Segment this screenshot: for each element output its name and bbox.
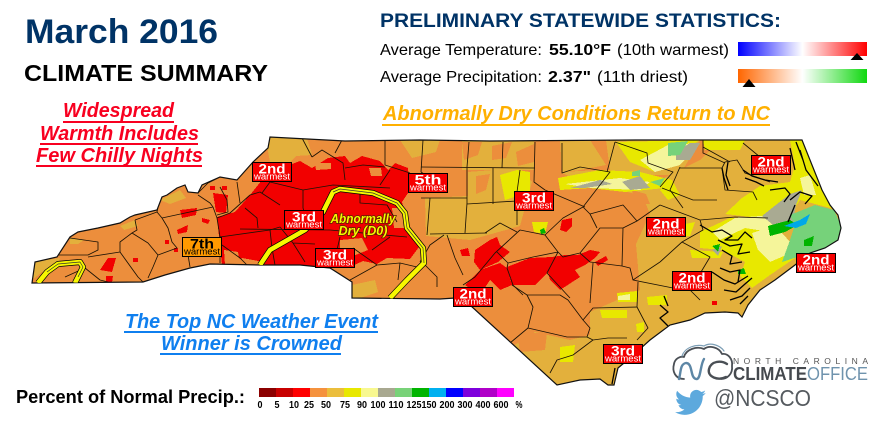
- label: 5th warmest: warmest: [409, 182, 447, 192]
- legend: percent of normal precipitation: [16, 387, 523, 411]
- rank labels: [182, 154, 836, 364]
- Climate Office wordmark: OFFICE: [807, 364, 868, 384]
- legend scale values: 5: [274, 400, 280, 411]
- statistics heading: PRELIMINARY STATEWIDE STATISTICS:: [380, 11, 781, 32]
- legend scale values: 110: [388, 400, 404, 411]
- Climate Office wordmark: CLIMATE: [733, 364, 807, 384]
- label: 2nd warmest, northeast: warmest: [752, 164, 790, 174]
- label: 3rd warmest, foothills: 3rd: [292, 210, 316, 224]
- label: 2nd warmest, coastal plain: [646, 216, 686, 236]
- label: 3rd warmest, Charlotte area: [316, 248, 354, 268]
- callout: abnormally dry conditions: Abnormally Dry Conditions Return to NC: [382, 103, 771, 125]
- label: 3rd warmest, Charlotte area: 3rd: [323, 248, 347, 262]
- temperature statistic: Average Temperature:: [380, 42, 542, 59]
- temperature statistic: (10th warmest): [617, 42, 729, 59]
- label: 2nd warmest, sandhills: warmest: [454, 296, 492, 306]
- callout: widespread warmth: Few Chilly Nights: [36, 145, 203, 167]
- county boundaries: [58, 138, 770, 373]
- label: 7th warmest: 7th: [190, 236, 214, 252]
- label: 2nd warmest, sandhills: 2nd: [460, 286, 486, 302]
- precipitation statistic: 2.37": [548, 69, 591, 86]
- label: 2nd warmest, northeast: 2nd: [758, 154, 784, 170]
- legend scale values: 75: [340, 400, 350, 411]
- legend colour swatches: [259, 388, 514, 397]
- label: 3rd warmest, foothills: warmest: [285, 220, 323, 230]
- precipitation rank bar: [738, 69, 867, 87]
- callout: top NC weather event: The Top NC Weather Event: [125, 311, 379, 333]
- logo: North Carolina Climate Office: [673, 344, 868, 384]
- icon: cloud with NC letters: [673, 344, 732, 379]
- label: 7th warmest: warmest: [183, 246, 221, 256]
- callout: widespread warmth: Widespread: [63, 100, 175, 122]
- legend title: Percent of Normal Precip.:: [16, 387, 245, 407]
- map: percent of normal precipitation across North Carolina: [20, 130, 850, 400]
- label: 3rd warmest, Wilmington: 3rd: [611, 344, 635, 358]
- label: 2nd warmest, southern coastal plain: warmest: [673, 280, 711, 290]
- callout: widespread warmth: Warmth Includes: [40, 123, 199, 145]
- drought label: Dry (D0): [338, 224, 388, 238]
- legend scale values: 300: [458, 400, 473, 411]
- legend scale values: %: [516, 400, 523, 411]
- legend scale values: 200: [440, 400, 455, 411]
- label: 3rd warmest, north central: 3rd: [522, 190, 546, 206]
- legend scale values: 10: [289, 400, 299, 411]
- drought boundary: D0 area, far west: [38, 262, 83, 283]
- legend scale values: 50: [321, 400, 331, 411]
- label: 2nd warmest, southern coastal plain: 2nd: [678, 270, 706, 286]
- label: 3rd warmest, north central: warmest: [515, 200, 553, 210]
- label: 2nd warmest, sandhills: [454, 286, 492, 306]
- temperature statistic: 55.10°F: [549, 42, 611, 59]
- label: 2nd warmest, southern coastal plain: [672, 270, 712, 290]
- label: 2nd warmest, northern mountains: [252, 162, 292, 182]
- label: 2nd warmest, northern mountains: 2nd: [258, 162, 286, 176]
- precipitation statistic: [380, 69, 688, 86]
- legend scale values: 25: [304, 400, 314, 411]
- panel: preliminary statewide statistics: [380, 11, 867, 87]
- label: 3rd warmest, north central: [514, 190, 554, 210]
- icon: twitter bird: [675, 390, 706, 415]
- legend scale values: 90: [357, 400, 367, 411]
- callout: top NC weather event: Winner is Crowned: [161, 333, 343, 355]
- state outline: [32, 137, 841, 385]
- label: 3rd warmest, Wilmington: warmest: [604, 354, 642, 364]
- label: 2nd warmest, northern mountains: warmest: [253, 172, 291, 182]
- label: 3rd warmest, Charlotte area: warmest: [316, 258, 354, 268]
- label: 2nd warmest, Outer Banks: warmest: [797, 262, 835, 272]
- label: 5th warmest: [408, 172, 448, 192]
- label: 2nd warmest, coastal plain: 2nd: [652, 216, 680, 232]
- legend scale values: 100: [370, 400, 386, 411]
- temperature rank bar: [738, 42, 867, 60]
- twitter handle: @NCSCO: [714, 385, 811, 411]
- callout: widespread warmth: [36, 100, 203, 167]
- legend scale values: 600: [494, 400, 509, 411]
- label: 3rd warmest, Wilmington: [604, 344, 642, 364]
- temperature statistic: [380, 42, 729, 59]
- North Carolina wordmark: NORTH CAROLINA: [733, 356, 868, 366]
- legend scale values: 400: [476, 400, 491, 411]
- label: 2nd warmest, Outer Banks: [796, 252, 836, 272]
- callout: top NC weather event: [124, 311, 379, 355]
- legend scale values: 0: [258, 400, 263, 411]
- drought label: Abnormally: [330, 212, 396, 226]
- Climate Office wordmark: [733, 364, 868, 384]
- precipitation statistic: (11th driest): [597, 69, 688, 86]
- subtitle: CLIMATE SUMMARY: [24, 60, 268, 86]
- legend scale values: [258, 400, 523, 411]
- label: 7th warmest: [182, 236, 222, 256]
- legend scale values: 125: [406, 400, 422, 411]
- title: March 2016: [25, 13, 218, 51]
- drought boundary: D0 area, central: [260, 189, 424, 298]
- label: 2nd warmest, coastal plain: warmest: [647, 226, 685, 236]
- label: 3rd warmest, foothills: [284, 210, 324, 230]
- label: 5th warmest: 5th: [414, 172, 442, 188]
- coastal sounds and inlets: [612, 142, 818, 384]
- label: 2nd warmest, Outer Banks: 2nd: [802, 252, 830, 268]
- legend scale values: 150: [422, 400, 437, 411]
- drought label: [330, 212, 396, 238]
- label: 2nd warmest, northeast: [752, 154, 790, 174]
- precipitation shading: [32, 138, 840, 384]
- precipitation statistic: Average Precipitation:: [380, 69, 542, 86]
